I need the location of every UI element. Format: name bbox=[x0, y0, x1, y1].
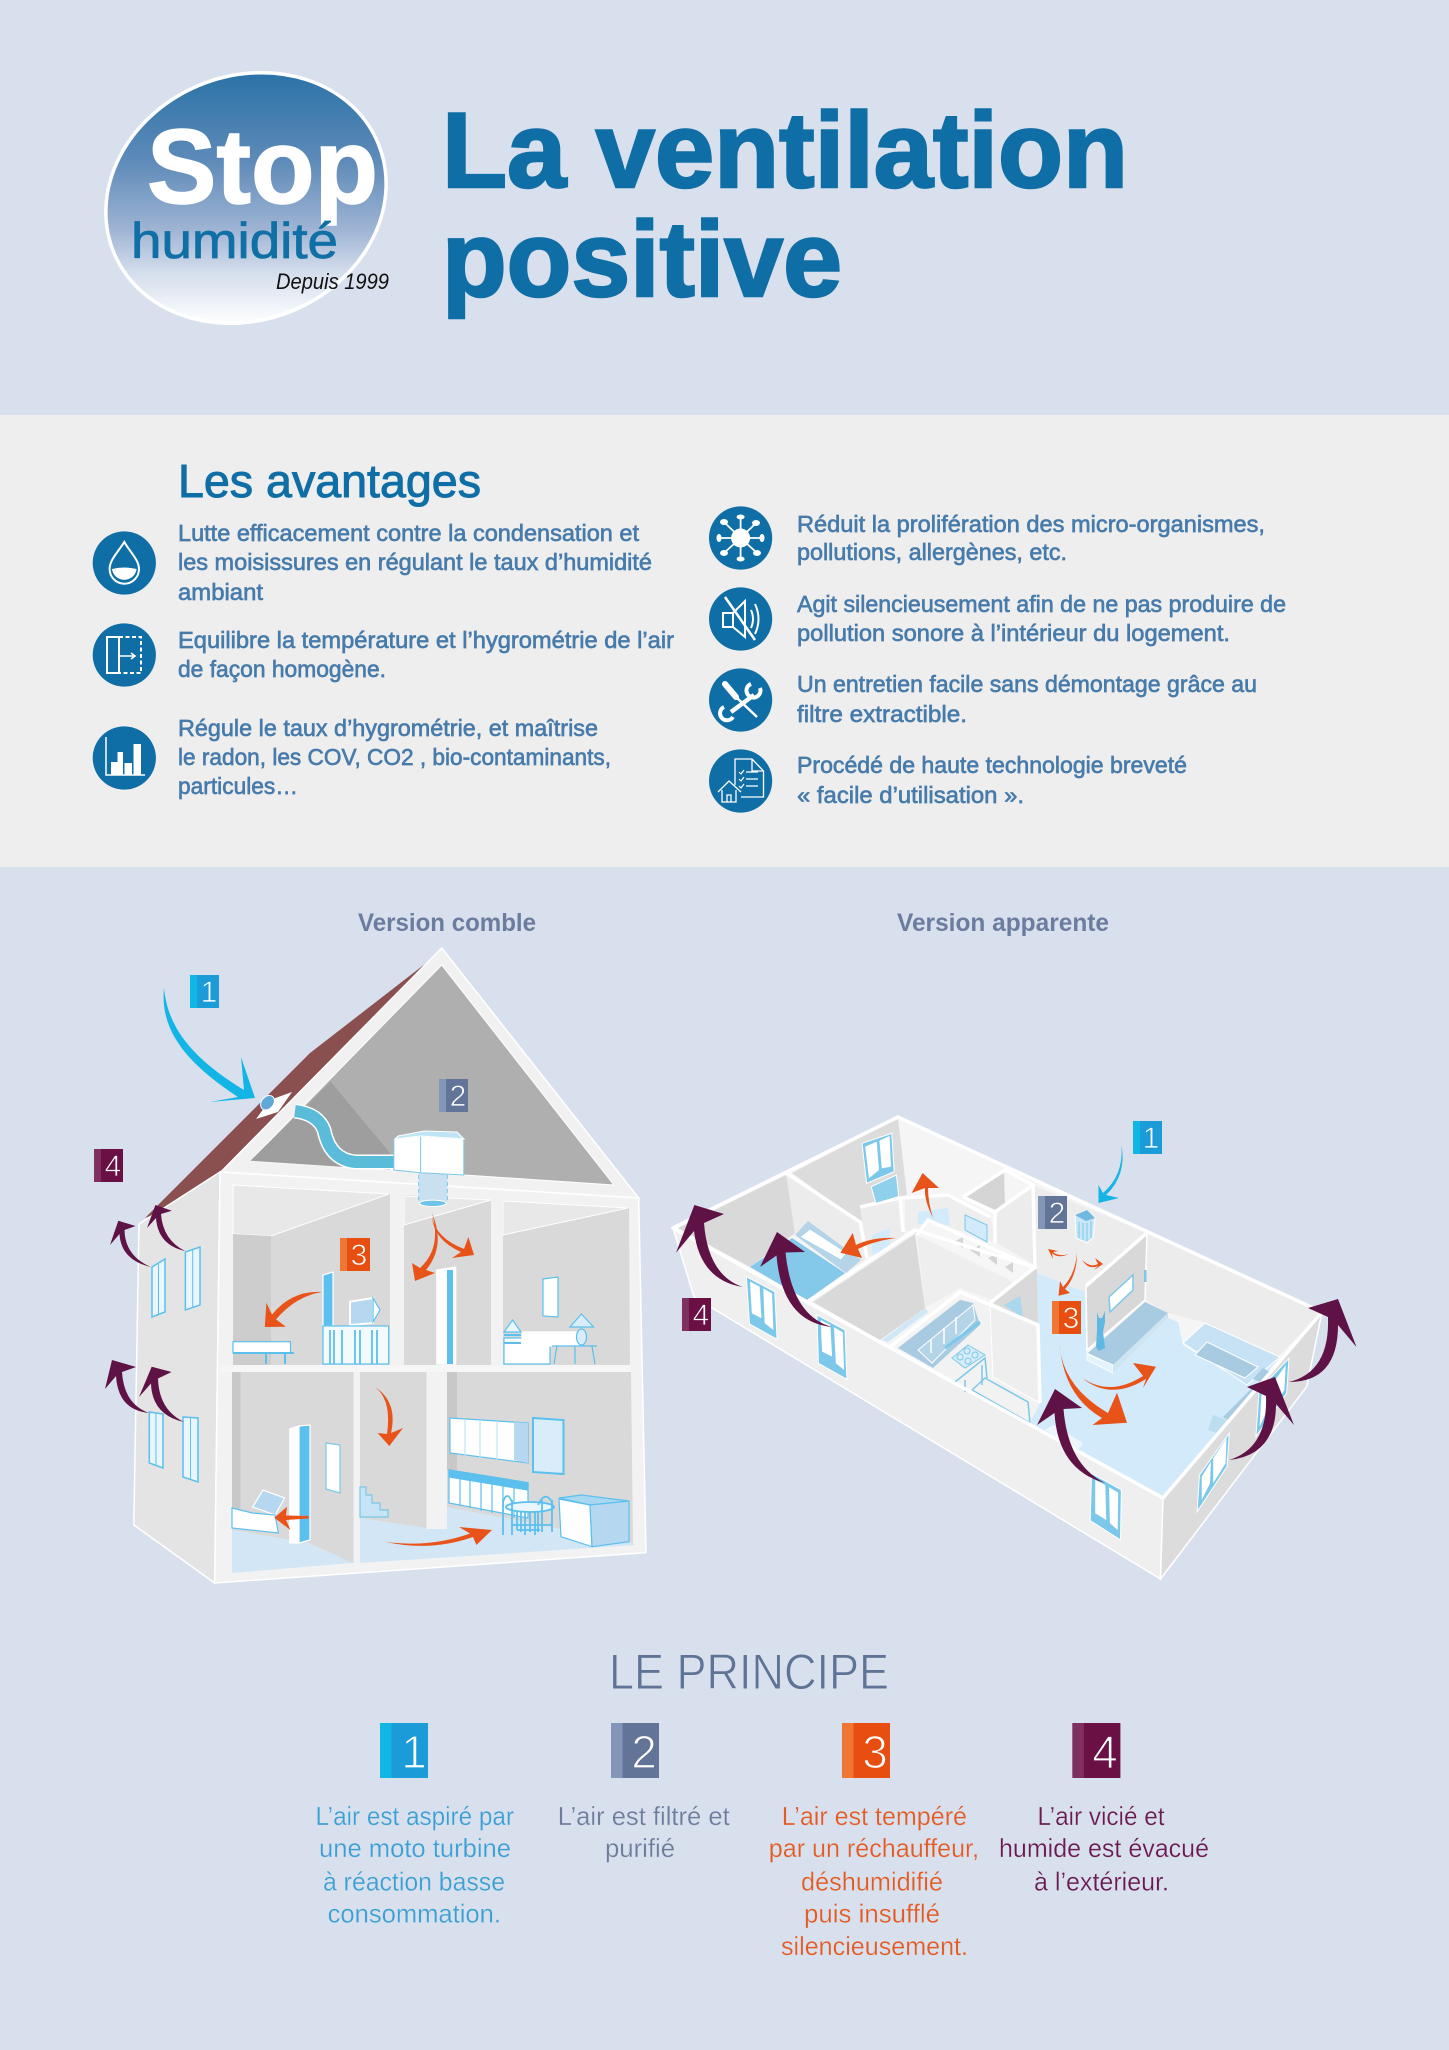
logo: Stop humidité: Depuis 1999 bbox=[276, 269, 389, 294]
step 3 text: déshumidifié bbox=[801, 1867, 943, 1897]
step 3 text: silencieusement. bbox=[781, 1931, 968, 1961]
text: technologie bbox=[797, 752, 1187, 808]
lower floor rooms bbox=[220, 1365, 635, 1573]
step 4 number bbox=[1072, 1723, 1120, 1778]
label: apartment 4: 4 bbox=[693, 1299, 709, 1332]
text: condensation: Lutte efficacement contre la condensation et bbox=[178, 520, 640, 546]
step 1 bbox=[316, 1723, 514, 1929]
title: La ventilation bbox=[442, 90, 1128, 210]
label: house 2: 2 bbox=[450, 1080, 466, 1113]
step 2 number bbox=[611, 1723, 659, 1778]
furniture: upper floor bbox=[233, 1267, 597, 1364]
label: house 4: 4 bbox=[105, 1150, 121, 1183]
arrows: insufflation bbox=[265, 1213, 492, 1546]
step 1 number bbox=[380, 1723, 428, 1778]
heading: le principe: LE PRINCIPE bbox=[609, 1644, 889, 1700]
heading: version apparente: Version apparente bbox=[897, 909, 1109, 937]
text: entretien bbox=[797, 671, 1257, 727]
step 1 text: à réaction basse bbox=[323, 1867, 505, 1897]
house cutaway illustration bbox=[105, 948, 646, 1583]
text: entretien: Un entretien facile sans démontage grâce au bbox=[797, 671, 1257, 697]
gable frame bbox=[221, 948, 639, 1198]
label: house 1 bbox=[190, 975, 219, 1009]
step 1 number: 1 bbox=[401, 1726, 427, 1778]
icon: virus bbox=[709, 506, 772, 570]
step 1 text: L’air est aspiré par bbox=[316, 1801, 514, 1831]
icon: homogeneous space bbox=[93, 623, 156, 687]
step 3 number: 3 bbox=[862, 1726, 888, 1778]
step 3 text: puis insufflé bbox=[804, 1899, 940, 1929]
step 3 bbox=[769, 1723, 979, 1961]
icon: bar chart bbox=[93, 726, 156, 790]
icon: water drop bbox=[93, 531, 156, 595]
furniture: lower floor bbox=[232, 1418, 629, 1547]
label: apartment 3: 3 bbox=[1063, 1302, 1079, 1335]
arrows: apartment insufflation bbox=[840, 1173, 1156, 1425]
panel: les avantages bbox=[0, 415, 1449, 867]
icon: tools bbox=[709, 668, 772, 732]
text: température: de façon homogène. bbox=[178, 656, 386, 682]
step 4 text: à l’extérieur. bbox=[1034, 1867, 1169, 1897]
step 1 text: une moto turbine bbox=[319, 1833, 511, 1863]
text: technologie: « facile d’utilisation ». bbox=[797, 782, 1024, 808]
label: house 3 bbox=[340, 1238, 370, 1272]
apartment windows bbox=[746, 1133, 1289, 1540]
icon: muted speaker bbox=[709, 587, 772, 651]
step 1 text: consommation. bbox=[328, 1899, 501, 1929]
step 3 text: par un réchauffeur, bbox=[769, 1833, 979, 1863]
title: positive bbox=[442, 199, 842, 319]
text: silencieux: Agit silencieusement afin de ne pas produire de bbox=[797, 591, 1286, 617]
text: silencieux: pollution sonore à l’intérieur du logement. bbox=[797, 620, 1230, 646]
heading: version comble: Version comble bbox=[358, 909, 536, 937]
label: apartment 2 bbox=[1038, 1196, 1067, 1230]
step 2 text: purifié bbox=[605, 1833, 675, 1863]
logo: Stop humidité: humidité bbox=[131, 213, 338, 269]
step 3 number bbox=[842, 1723, 890, 1778]
walls and rooms bbox=[673, 1117, 1322, 1579]
logo: Stop humidité: Stop bbox=[147, 108, 378, 226]
step 4 number: 4 bbox=[1092, 1726, 1118, 1778]
label: apartment 1 bbox=[1133, 1121, 1162, 1155]
ventilation unit bbox=[394, 1131, 464, 1207]
text: hygrométrie bbox=[178, 715, 611, 799]
front frame bbox=[215, 1172, 646, 1583]
roof vent bbox=[256, 1092, 292, 1119]
step 4 text: L’air vicié et bbox=[1038, 1801, 1165, 1831]
text: température: Equilibre la température et l’hygrométrie de l’air bbox=[178, 627, 674, 653]
text: hygrométrie: particules… bbox=[178, 773, 298, 799]
text: silencieux bbox=[797, 591, 1286, 646]
duct bbox=[295, 1111, 394, 1162]
arrow: apartment intake bbox=[1098, 1145, 1123, 1203]
text: micro-organismes: pollutions, allergènes, etc. bbox=[797, 539, 1067, 565]
text: température bbox=[178, 627, 674, 682]
attic side wall bbox=[250, 1082, 390, 1170]
label: apartment 1: 1 bbox=[1143, 1122, 1159, 1155]
step 2 text bbox=[558, 1801, 730, 1863]
apartment illustration bbox=[673, 1117, 1356, 1579]
step 1 text bbox=[316, 1801, 514, 1929]
step 3 text: L’air est tempéré bbox=[782, 1801, 967, 1831]
side wall bbox=[134, 1172, 220, 1583]
heading: les avantages: Les avantages bbox=[178, 455, 481, 507]
logo: Stop humidité bbox=[67, 31, 425, 365]
attic back wall bbox=[250, 965, 614, 1185]
icon: document and house bbox=[709, 749, 772, 813]
label: apartment 3 bbox=[1052, 1301, 1081, 1335]
text: hygrométrie: Régule le taux d’hygrométrie, et maîtrise bbox=[178, 715, 598, 741]
step 2 number: 2 bbox=[631, 1726, 657, 1778]
upper floor rooms bbox=[233, 1185, 630, 1365]
text: condensation: ambiant bbox=[178, 579, 264, 605]
unit: wall vent bbox=[1075, 1210, 1095, 1243]
text: micro-organismes bbox=[797, 511, 1265, 565]
step 4 text bbox=[999, 1801, 1209, 1897]
text: micro-organismes: Réduit la prolifération des micro-organismes, bbox=[797, 511, 1265, 537]
step 4 bbox=[999, 1723, 1209, 1897]
label: house 3: 3 bbox=[351, 1239, 367, 1272]
roof bbox=[145, 957, 434, 1218]
text: hygrométrie: le radon, les COV, CO2 , bio-contaminants, bbox=[178, 744, 611, 770]
label: house 1: 1 bbox=[201, 976, 217, 1009]
text: entretien: filtre extractible. bbox=[797, 701, 967, 727]
arrows: apartment exhaust bbox=[676, 1205, 1356, 1483]
step 4 text: humide est évacué bbox=[999, 1833, 1209, 1863]
text: condensation: les moisissures en régulant le taux d’humidité bbox=[178, 549, 652, 575]
label: house 2 bbox=[439, 1079, 468, 1113]
step 3 text bbox=[769, 1801, 979, 1961]
label: apartment 4 bbox=[682, 1298, 711, 1332]
text: technologie: Procédé de haute technologie breveté bbox=[797, 752, 1187, 778]
title bbox=[442, 90, 1128, 319]
arrows: exhaust bbox=[105, 1205, 185, 1422]
step 2 bbox=[558, 1723, 730, 1863]
text: condensation bbox=[178, 520, 652, 605]
side wall windows bbox=[149, 1247, 200, 1482]
label: house 4 bbox=[94, 1149, 123, 1183]
step 2 text: L’air est filtré et bbox=[558, 1801, 730, 1831]
label: apartment 2: 2 bbox=[1049, 1197, 1065, 1230]
arrow: intake bbox=[164, 988, 255, 1102]
